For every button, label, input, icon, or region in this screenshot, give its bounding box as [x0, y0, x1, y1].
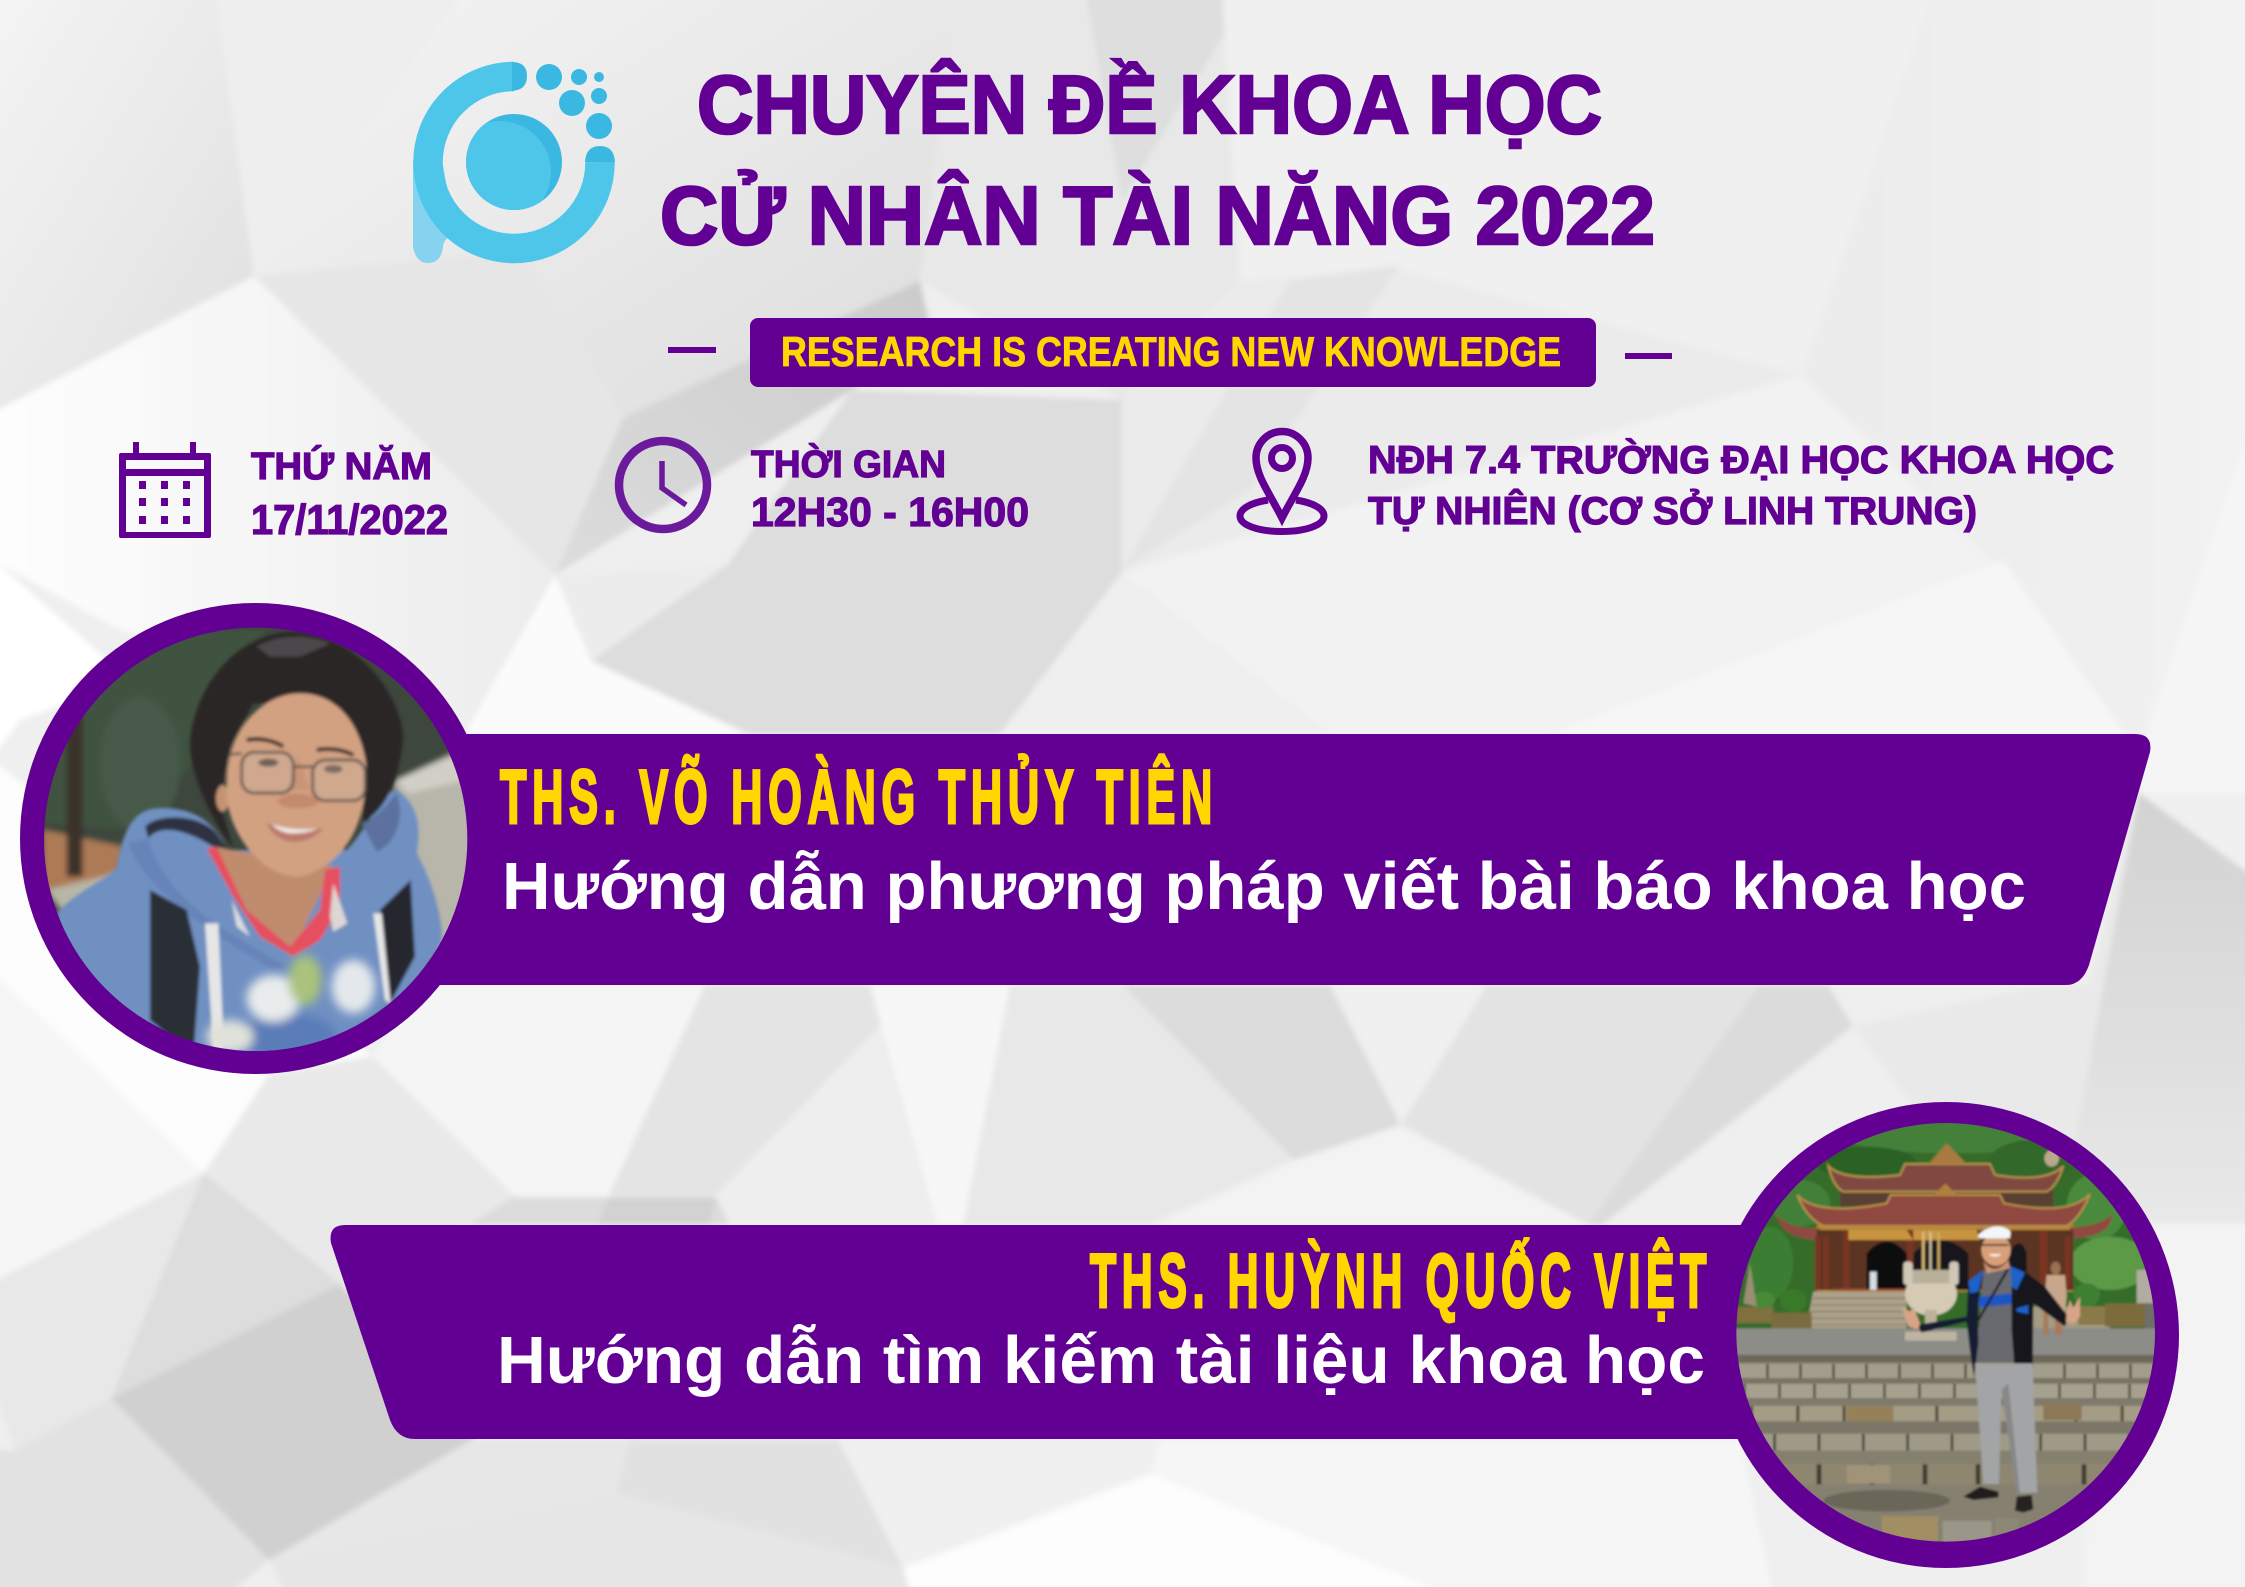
date text [251, 444, 448, 543]
tagline pill [668, 318, 1672, 387]
logo centre circle [466, 114, 562, 210]
tagline text: RESEARCH IS CREATING NEW KNOWLEDGE [781, 328, 1561, 375]
stone steps [1733, 1355, 2163, 1548]
location text: TỰ NHIÊN (CƠ SỞ LINH TRUNG) [1368, 489, 1977, 533]
lower half facets [0, 940, 204, 1299]
speaker 2 name: THS. HUỲNH QUỐC VIỆT [1090, 1238, 1712, 1324]
icon: location pin [1240, 432, 1324, 532]
speaker 1 portrait [20, 603, 491, 1090]
title [660, 58, 1655, 262]
logo ring ends [512, 62, 615, 162]
speaker 1 name: THS. VÕ HOÀNG THỦY TIÊN [500, 754, 1218, 840]
date text: THỨ NĂM [251, 444, 432, 488]
icon: clock [619, 441, 707, 529]
person [1902, 1226, 2080, 1513]
speaker 1 topic: Hướng dẫn phương pháp viết bài báo khoa học [502, 849, 2026, 924]
photo: woman in blue hoodie [44, 628, 468, 1051]
title line 2: CỬ NHÂN TÀI NĂNG 2022 [660, 169, 1655, 262]
time text [751, 442, 1029, 535]
photo: man in front of pagoda [1733, 1120, 2163, 1548]
logo tail [413, 160, 456, 263]
banner: speaker 1 [400, 734, 2150, 985]
speaker 2 topic: Hướng dẫn tìm kiếm tài liệu khoa học [497, 1323, 1705, 1398]
date text: 17/11/2022 [251, 496, 448, 543]
speaker 2 portrait [1713, 1102, 2179, 1568]
logo ring [428, 76, 600, 248]
icon: calendar [119, 442, 211, 538]
banner: speaker 2 [331, 1225, 1900, 1439]
title line 1: CHUYÊN ĐỀ KHOA HỌC [697, 58, 1602, 151]
time text: 12H30 - 16H00 [751, 489, 1029, 535]
time text: THỜI GIAN [751, 442, 946, 486]
location text [1368, 438, 2114, 533]
location text: NĐH 7.4 TRƯỜNG ĐẠI HỌC KHOA HỌC [1368, 438, 2114, 482]
logo dots [536, 64, 612, 139]
logo [413, 62, 615, 263]
